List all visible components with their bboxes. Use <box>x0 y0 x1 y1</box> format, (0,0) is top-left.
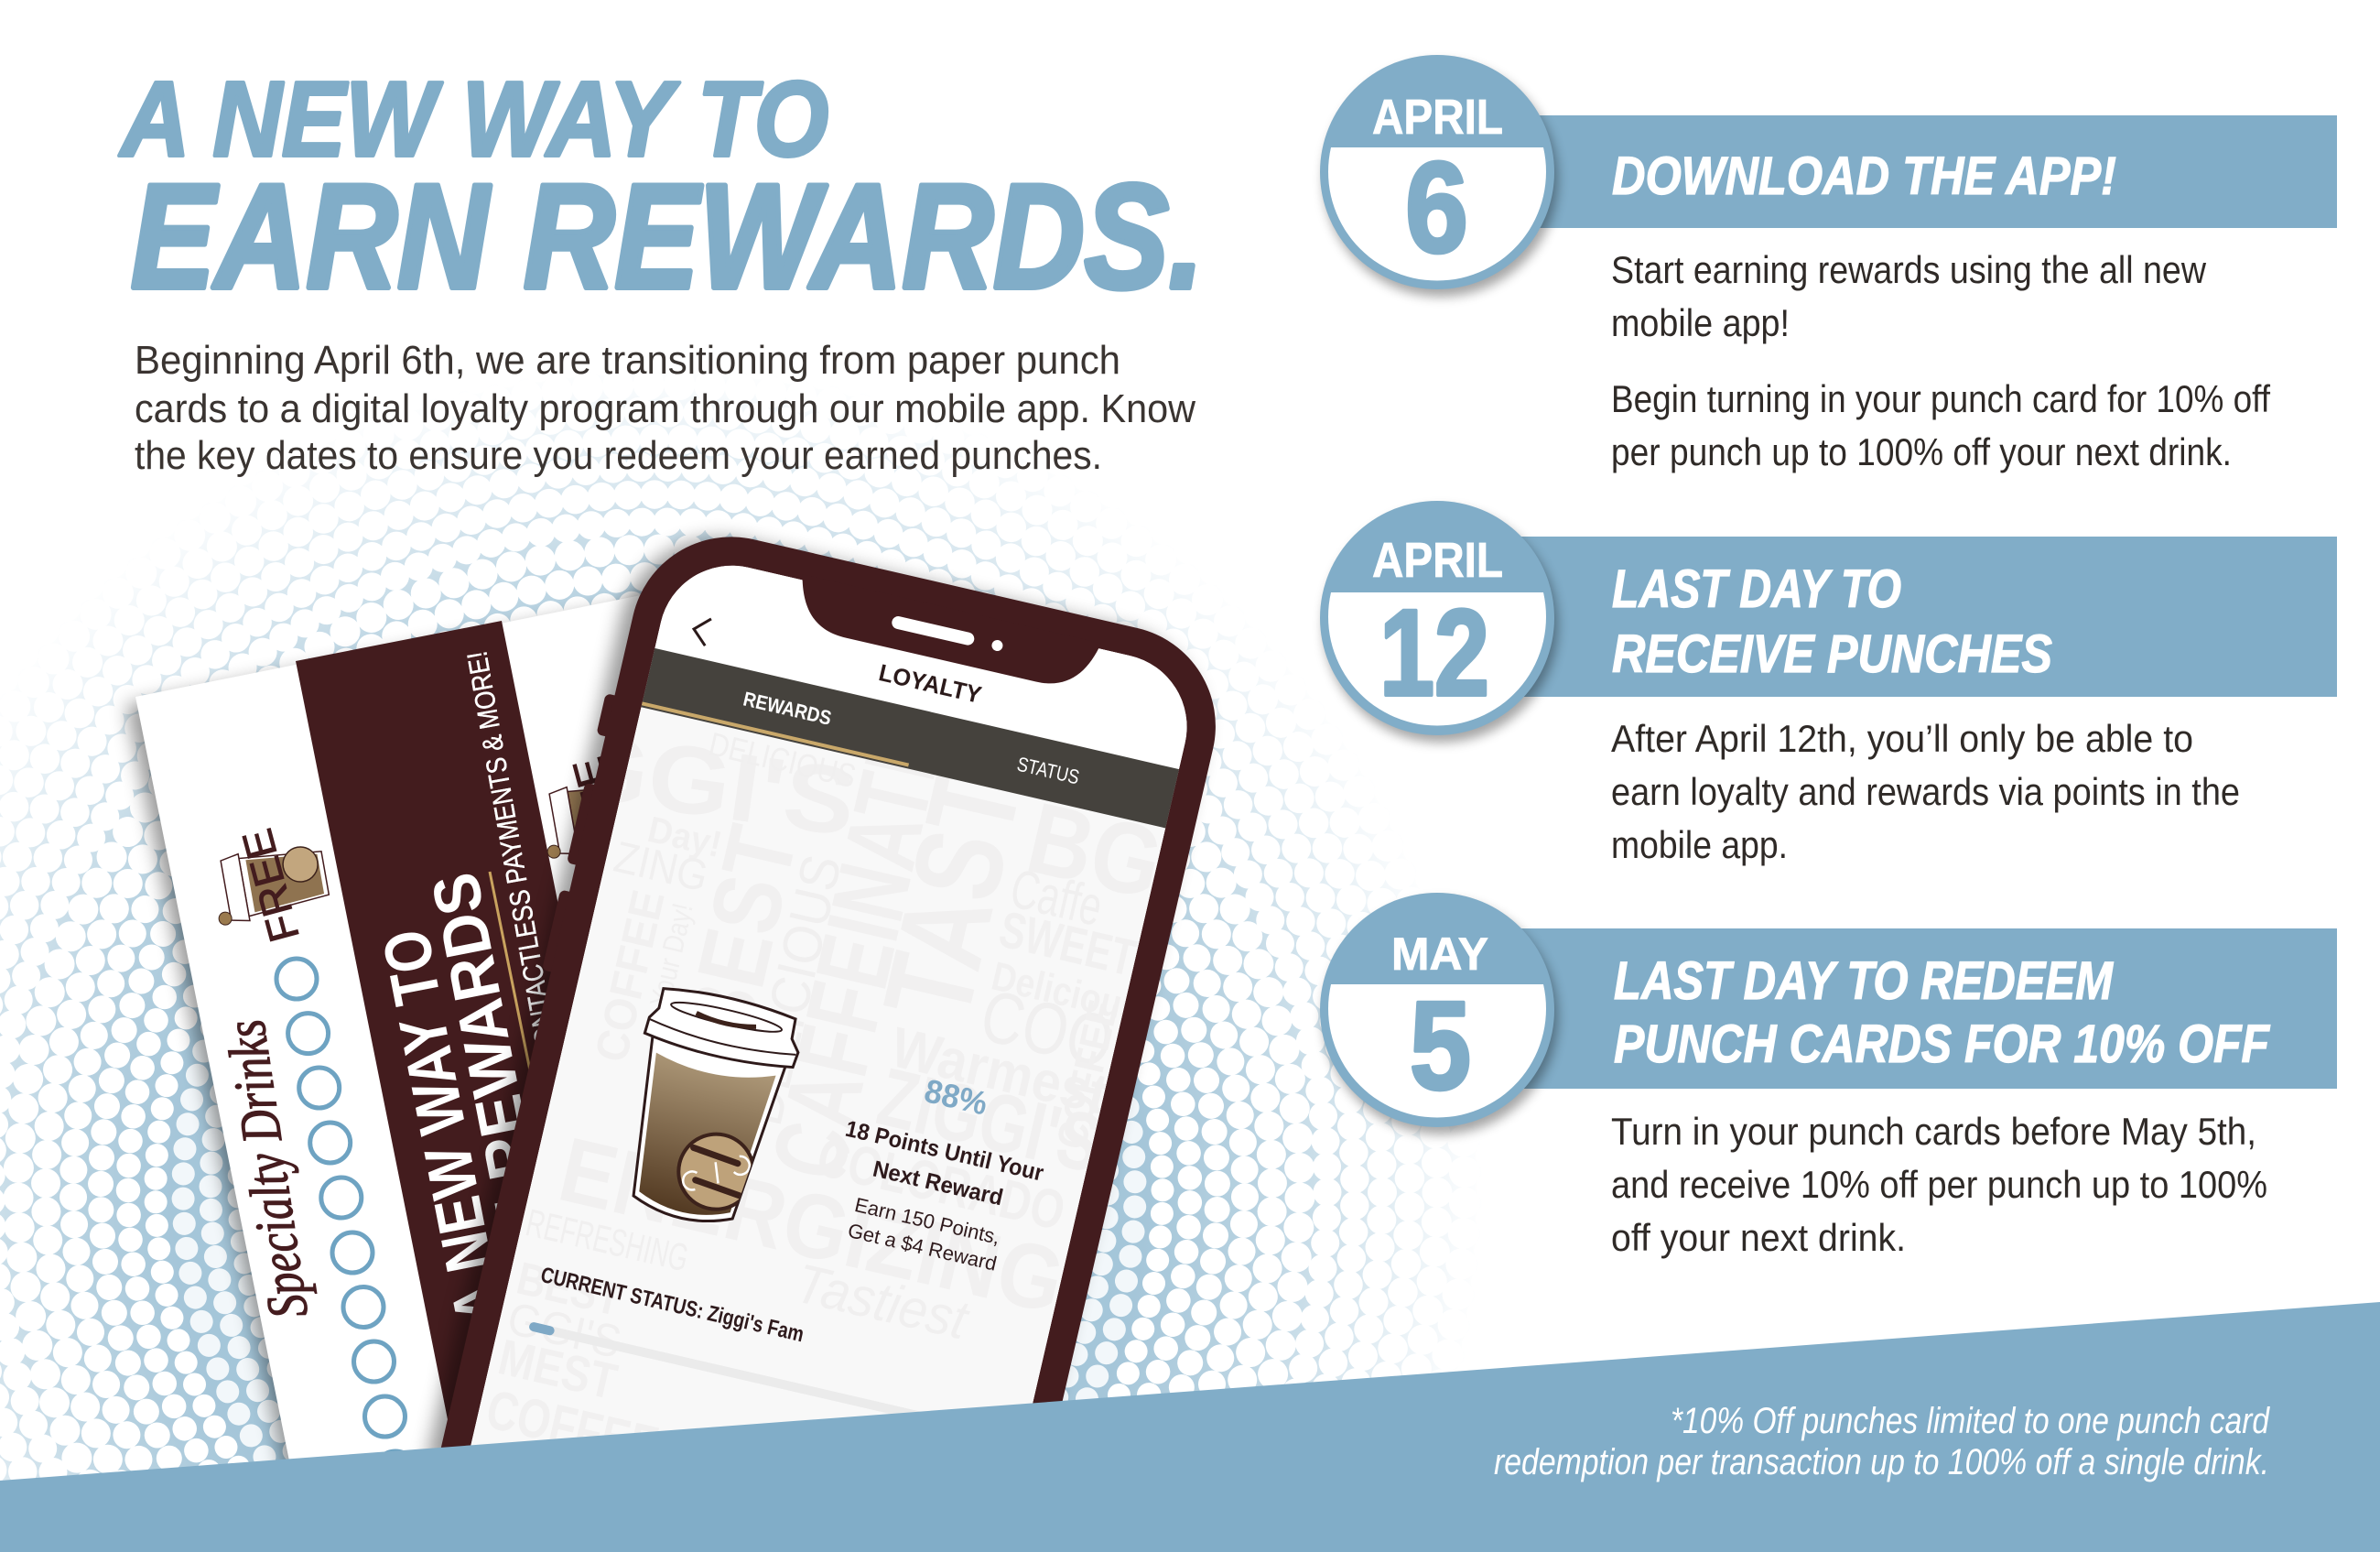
watermark words: Delicious <box>988 954 1144 1032</box>
punch card <box>126 579 915 1547</box>
heading: RECEIVE PUNCHES <box>1612 624 2052 684</box>
watermark words: ENERGIZING <box>550 1118 1073 1333</box>
notch <box>791 574 1101 694</box>
date badge: APRIL <box>1372 533 1503 588</box>
card band text <box>369 649 586 1371</box>
body text: and receive 10% off per punch up to 100% <box>1611 1163 2267 1206</box>
body text: After April 12th, you’ll only be able to <box>1611 717 2193 760</box>
date badge: 6 <box>1405 135 1468 279</box>
intro text: the key dates to ensure you redeem your earned punches. <box>135 433 1102 478</box>
title: EARN REWARDS. <box>131 154 1204 320</box>
heading: PUNCH CARDS FOR 10% OFF <box>1614 1015 2270 1074</box>
icon: small cup with free: FREE <box>233 824 308 947</box>
step 3: may 5 <box>1320 893 2337 1259</box>
watermark words: REFRESHING <box>522 1200 692 1279</box>
screen <box>471 566 1187 1445</box>
icon: second cup partly hidden: FREE <box>563 753 639 875</box>
card script label: Specialty Drinks <box>214 1016 320 1322</box>
body text: Start earning rewards using the all new <box>1611 248 2207 291</box>
maroon card band <box>296 621 687 1547</box>
watermark words: DELICIOUS <box>731 850 853 1131</box>
banner <box>1483 537 2337 697</box>
halftone background <box>0 348 1556 1552</box>
footnote: *10% Off punches limited to one punch card <box>1671 1401 2270 1441</box>
heading: LAST DAY TO REDEEM <box>1614 951 2114 1011</box>
body text: off your next drink. <box>1611 1216 1906 1259</box>
gold line <box>490 872 586 1346</box>
watermark words: CAFFEINATED <box>750 664 977 1189</box>
watermark words: BEST <box>513 1253 626 1326</box>
watermark words: Your Day! <box>644 900 699 1010</box>
date badge: APRIL <box>1372 90 1503 145</box>
banner <box>1483 928 2337 1089</box>
heading: DOWNLOAD THE APP! <box>1612 147 2116 206</box>
icon: small cup with free <box>209 824 331 947</box>
body text: mobile app. <box>1611 823 1788 866</box>
watermark words <box>319 581 1214 1552</box>
banner <box>1483 115 2337 228</box>
date badge <box>1320 893 1558 1134</box>
body text: Begin turning in your punch card for 10% off <box>1611 377 2270 420</box>
bottom band <box>0 1302 2380 1552</box>
watermark words: ZIGGI'S <box>466 698 862 857</box>
body text <box>1611 1110 2267 1259</box>
reward text: Next Reward <box>871 1156 1005 1210</box>
intro text: Beginning April 6th, we are transitioning from paper punch <box>135 338 1120 383</box>
current status <box>528 1263 1008 1438</box>
watermark words: COFFEE <box>481 1378 665 1477</box>
reward text: 18 Points Until Your <box>843 1116 1046 1187</box>
watermark words: Day! <box>644 809 725 865</box>
watermark words: Tastiest <box>790 1252 975 1351</box>
heading <box>1614 951 2270 1074</box>
watermark words: DELICIOUS <box>706 725 860 795</box>
watermark words: TASTY <box>857 697 1062 1031</box>
watermark words: MEST <box>493 1328 622 1410</box>
watermark words: Caffe <box>1005 857 1108 938</box>
heading: LAST DAY TO <box>1612 559 1901 619</box>
punch circles <box>276 959 416 1492</box>
date badge: MAY <box>1391 928 1488 980</box>
step 2: april 12 <box>1320 501 2337 866</box>
title <box>118 60 1204 320</box>
body text: Turn in your punch cards before May 5th, <box>1611 1110 2256 1153</box>
watermark words: BEST <box>664 817 817 1055</box>
card band text: A NEW WAY TO <box>369 924 517 1329</box>
side buttons <box>542 693 633 976</box>
watermark words: ZIGGI'S <box>870 1051 1109 1191</box>
card band text: EARN REWARDS <box>418 867 586 1371</box>
body text <box>1611 248 2270 473</box>
watermark words: ZING <box>610 833 712 901</box>
heading <box>1612 559 2052 684</box>
reward text: Earn 150 Points, <box>852 1193 1002 1249</box>
reward text: Get a $4 Reward <box>846 1219 999 1275</box>
date badge <box>1320 501 1558 743</box>
body text: mobile app! <box>1611 301 1790 344</box>
reward text <box>821 1116 1046 1281</box>
tab bar <box>641 648 1179 828</box>
header label: LOYALTY <box>876 658 984 709</box>
card band text: CONTACTLESS PAYMENTS & MORE! <box>460 649 565 1065</box>
intro text <box>135 338 1195 478</box>
icon: back chevron <box>691 615 711 646</box>
watermark words: COOL <box>974 974 1152 1091</box>
watermark words: COFFEE <box>1047 995 1127 1154</box>
step 1: april 6 <box>1320 55 2337 473</box>
watermark words: Warmest <box>885 1015 1114 1127</box>
phone <box>417 526 1216 1449</box>
footnote <box>1494 1401 2270 1482</box>
date badge <box>1320 55 1558 297</box>
body text: per punch up to 100% off your next drink. <box>1611 430 2232 473</box>
date badge: 5 <box>1410 976 1471 1116</box>
date badge: 12 <box>1379 585 1489 722</box>
percent: 88% <box>921 1071 991 1123</box>
tab bar: STATUS <box>1015 753 1082 788</box>
watermark words: GGI'S <box>503 1292 626 1368</box>
watermark words: SWEET <box>994 900 1141 987</box>
watermark words: BG <box>1018 781 1173 920</box>
icon: second cup partly hidden <box>537 753 660 875</box>
current status: CURRENT STATUS: Ziggi's Fam <box>538 1263 806 1347</box>
watermark words: COLORADO <box>812 1125 1071 1242</box>
intro text: cards to a digital loyalty program through our mobile app. Know <box>135 386 1195 431</box>
body text <box>1611 717 2240 866</box>
body text: earn loyalty and rewards via points in the <box>1611 770 2240 813</box>
icon: coffee cup <box>632 987 800 1222</box>
watermark words: COFFEE <box>585 885 675 1067</box>
tab bar: REWARDS <box>741 687 834 730</box>
title: A NEW WAY TO <box>118 60 828 179</box>
